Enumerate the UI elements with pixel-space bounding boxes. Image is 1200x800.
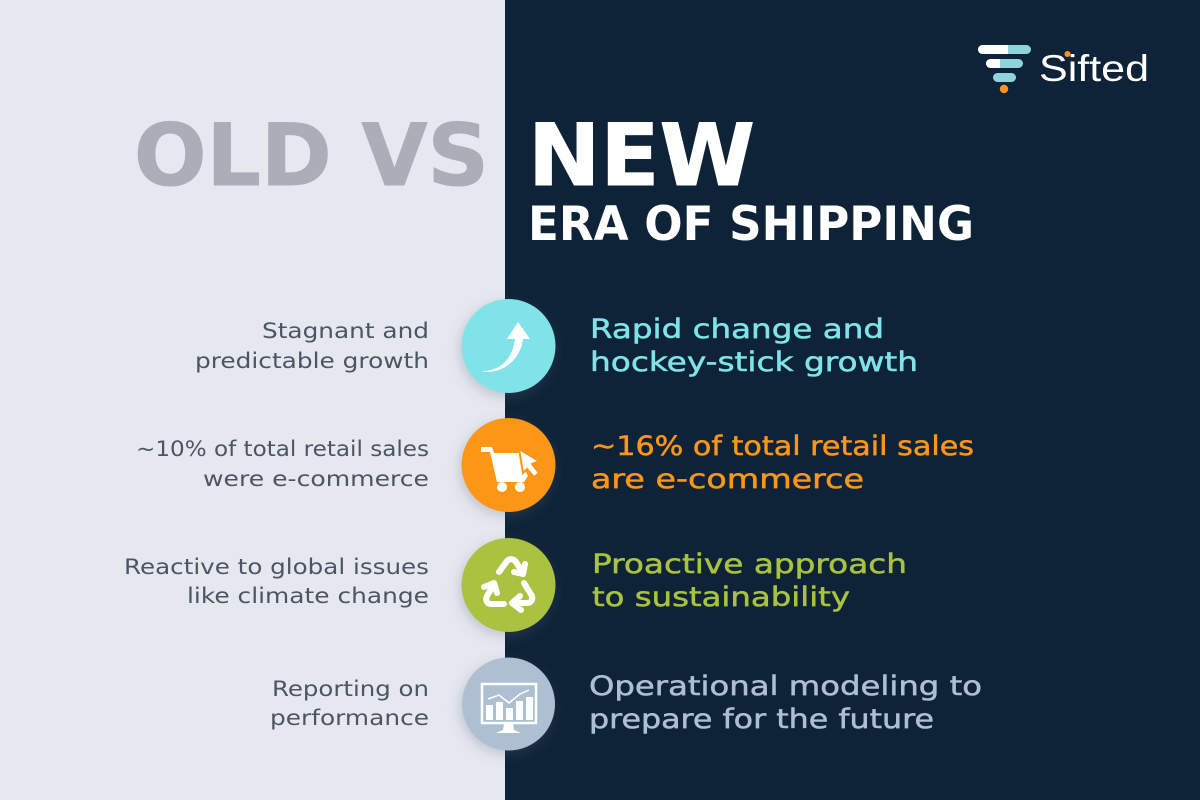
text: new e-commerce: are e-commerce xyxy=(591,464,864,495)
text: new sustainability: Proactive approach xyxy=(592,549,907,580)
text: old e-commerce xyxy=(136,437,429,491)
text: new modeling: Operational modeling to xyxy=(589,671,982,702)
text: new growth xyxy=(590,314,918,378)
text: new e-commerce xyxy=(591,431,974,495)
text: old growth xyxy=(195,319,429,373)
title: old vs: OLD VS xyxy=(134,106,489,206)
icon: recycle xyxy=(462,538,556,632)
text: old sustainability xyxy=(124,555,429,608)
text: old growth: predictable growth xyxy=(195,349,429,373)
text: new growth: Rapid change and xyxy=(590,314,884,345)
text: old sustainability: Reactive to global issues xyxy=(124,555,429,579)
title: new: NEW xyxy=(528,106,755,206)
text: old growth: Stagnant and xyxy=(262,319,429,343)
text: old reporting xyxy=(270,677,429,730)
text: new sustainability: to sustainability xyxy=(592,582,850,613)
panel: new era background xyxy=(505,0,1200,800)
text: old reporting: Reporting on xyxy=(272,677,429,701)
icon: growth arrow xyxy=(462,299,556,393)
logo: Sifted: Sifted xyxy=(1039,48,1149,89)
text: new modeling xyxy=(589,671,982,735)
text: old reporting: performance xyxy=(270,706,429,730)
text: old e-commerce: ~10% of total retail sales xyxy=(136,437,429,461)
text: old sustainability: like climate change xyxy=(187,584,429,608)
text: new sustainability xyxy=(592,549,907,613)
title: era of shipping: ERA OF SHIPPING xyxy=(528,197,974,252)
logo: Sifted xyxy=(978,45,1149,93)
text: old e-commerce: were e-commerce xyxy=(203,467,429,491)
icon: shopping cart xyxy=(462,418,556,512)
text: new e-commerce: ~16% of total retail sales xyxy=(591,431,974,462)
icon: monitor chart xyxy=(462,658,555,750)
panel: old era background xyxy=(0,0,505,800)
text: new growth: hockey-stick growth xyxy=(590,347,918,378)
text: new modeling: prepare for the future xyxy=(589,704,934,735)
